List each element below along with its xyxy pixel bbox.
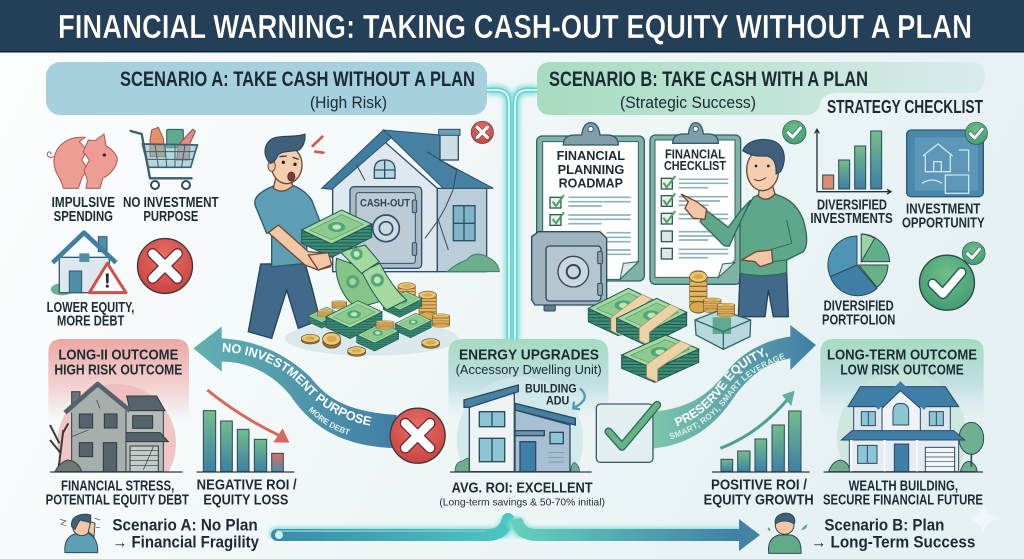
cracked-house warning badge	[471, 121, 494, 144]
arrow: no investment purpose: NO INVESTMENT PURPOSE	[222, 343, 372, 426]
arrow: building ADU	[573, 388, 585, 409]
arrow: preserve equity: SMART; ROYI, SMART LEVERAGE	[670, 353, 786, 439]
panel: strategy checklist	[810, 122, 988, 328]
header: scenario B: (Strategic Success)	[620, 93, 756, 112]
panel: scenario A risk factors	[47, 127, 219, 330]
check badge: pie	[962, 242, 985, 265]
heading: LOW RISK OUTCOME	[840, 362, 964, 379]
label: average ROI: AVG. ROI: EXCELLENT	[452, 480, 593, 497]
icon: healthy house	[829, 384, 984, 472]
clipboard: financial planning roadmap: FINANCIAL	[557, 148, 625, 163]
outcome card background	[48, 339, 189, 472]
label: investment opportunity: OPPORTUNITY	[902, 216, 985, 232]
icon: red cross	[138, 239, 192, 293]
decorative sparkle	[967, 504, 999, 533]
clipboard: financial planning roadmap: PLANNING	[558, 162, 624, 177]
cracked house with safe	[322, 129, 499, 272]
header: scenario A: SCENARIO A: TAKE CASH WITHOUT A PLAN	[120, 67, 475, 91]
label: impulsive spending: IMPULSIVE	[52, 194, 115, 211]
heading: ENERGY UPGRADES	[459, 347, 599, 364]
label: negative ROI: EQUITY LOSS	[203, 492, 288, 509]
heading: LONG-TERM OUTCOME	[827, 347, 977, 364]
label: financial stress: POTENTIAL EQUITY DEBT	[46, 493, 189, 509]
label: lower equity, more debt: MORE DEBT	[57, 313, 124, 330]
man	[248, 134, 331, 338]
bottom connector: scenario A line	[275, 519, 509, 539]
heading: LONG-II OUTCOME	[58, 347, 178, 364]
header: scenario A	[46, 62, 487, 115]
label: positive ROI: POSITIVE ROI /	[711, 477, 808, 494]
outcome card background	[820, 339, 984, 468]
organised cash, coins and glass jar	[588, 271, 751, 382]
panel: energy upgrades ADU	[439, 339, 608, 508]
icon: shopping cart	[131, 127, 197, 189]
clipboard: financial planning roadmap: ROADMAP	[559, 176, 623, 191]
takeaway: scenario A: Scenario A: No Plan	[112, 515, 258, 534]
cracked house with safe: CASH-OUT	[360, 198, 410, 210]
header: scenario B	[537, 62, 985, 115]
central glowing connector	[487, 90, 537, 345]
label: investment opportunity: INVESTMENT	[906, 202, 980, 218]
icon: calm person	[768, 513, 808, 553]
takeaway: scenario A: → Financial Fragility	[112, 533, 260, 552]
title banner	[0, 0, 1024, 52]
label: diversified investments: DIVERSIFIED	[817, 197, 887, 213]
icon: blueprint of investment opportunity	[907, 130, 983, 197]
icon: red cross on arrow	[390, 408, 445, 463]
arrow: no investment purpose	[193, 326, 397, 448]
label: financial stress: FINANCIAL STRESS,	[61, 478, 174, 494]
check badge	[783, 121, 806, 144]
chart: diversified investments	[815, 129, 891, 194]
illustration: stressed man dropping cash from cracked house	[248, 121, 499, 356]
label: building ADU: ADU	[546, 394, 569, 407]
arrow: preserve equity	[654, 325, 816, 448]
check badge: blueprint	[965, 122, 988, 145]
icon: ADU house	[455, 385, 579, 472]
icon: check box	[596, 404, 657, 462]
icon: house with warning triangle: !	[104, 269, 111, 292]
arrow: no investment purpose: MORE DEBT	[308, 406, 350, 434]
pile of cash and coins	[285, 210, 458, 356]
icon: broken piggy bank	[47, 134, 117, 188]
man pointing at checklist	[681, 139, 807, 317]
label: positive ROI: EQUITY GROWTH	[704, 492, 814, 509]
pie chart: diversified portfolio	[828, 234, 890, 296]
arrow: preserve equity: PRESERVE EQUITY,	[674, 348, 768, 426]
icon: worried person	[60, 514, 100, 553]
clipboard: financial checklist: FINANCIAL	[665, 147, 725, 161]
label: wealth building: WEALTH BUILDING,	[849, 478, 958, 494]
chart: positive ROI bars	[712, 391, 810, 472]
label: building ADU: BUILDING	[525, 383, 577, 396]
icon: damaged house	[50, 384, 168, 472]
panel: low-risk outcome	[596, 325, 998, 554]
clipboard: financial planning roadmap	[537, 123, 644, 281]
label: diversified portfolio: PORTFOLION	[822, 312, 895, 328]
card background	[448, 339, 608, 468]
header: scenario A: (High Risk)	[310, 93, 387, 112]
icon: big check	[920, 255, 974, 310]
clipboard: financial checklist	[650, 123, 741, 284]
takeaway: scenario B: → Long-Term Success	[811, 533, 975, 552]
safe	[532, 232, 607, 311]
label: diversified portfolio: DIVERSIFIED	[824, 298, 894, 314]
label: no investment purpose: PURPOSE	[143, 208, 198, 225]
label: no investment purpose: NO INVESTMENT	[123, 194, 219, 211]
panel: high-risk outcome	[46, 326, 446, 554]
header: scenario B: SCENARIO B: TAKE CASH WITH A PLAN	[549, 67, 868, 91]
subheading: (Accessory Dwelling Unit)	[456, 362, 602, 377]
clipboard: financial checklist: CHECKLIST	[664, 159, 726, 173]
label: negative ROI: NEGATIVE ROI /	[197, 477, 297, 494]
label: impulsive spending: SPENDING	[54, 208, 113, 225]
note: savings: (Long-term savings & 50-70% initial)	[439, 497, 605, 508]
takeaway: scenario B: Scenario B: Plan	[824, 515, 944, 534]
label: diversified investments: INVESTMENTS	[810, 211, 893, 227]
chart: negative ROI bars	[197, 390, 294, 472]
icon: house with warning triangle	[51, 233, 126, 295]
illustration: planner with clipboards, safe and organised cash	[532, 121, 807, 382]
label: lower equity, more debt: LOWER EQUITY,	[47, 299, 134, 316]
heading: HIGH RISK OUTCOME	[54, 362, 182, 379]
bottom connector: scenario B arrow	[515, 519, 760, 551]
